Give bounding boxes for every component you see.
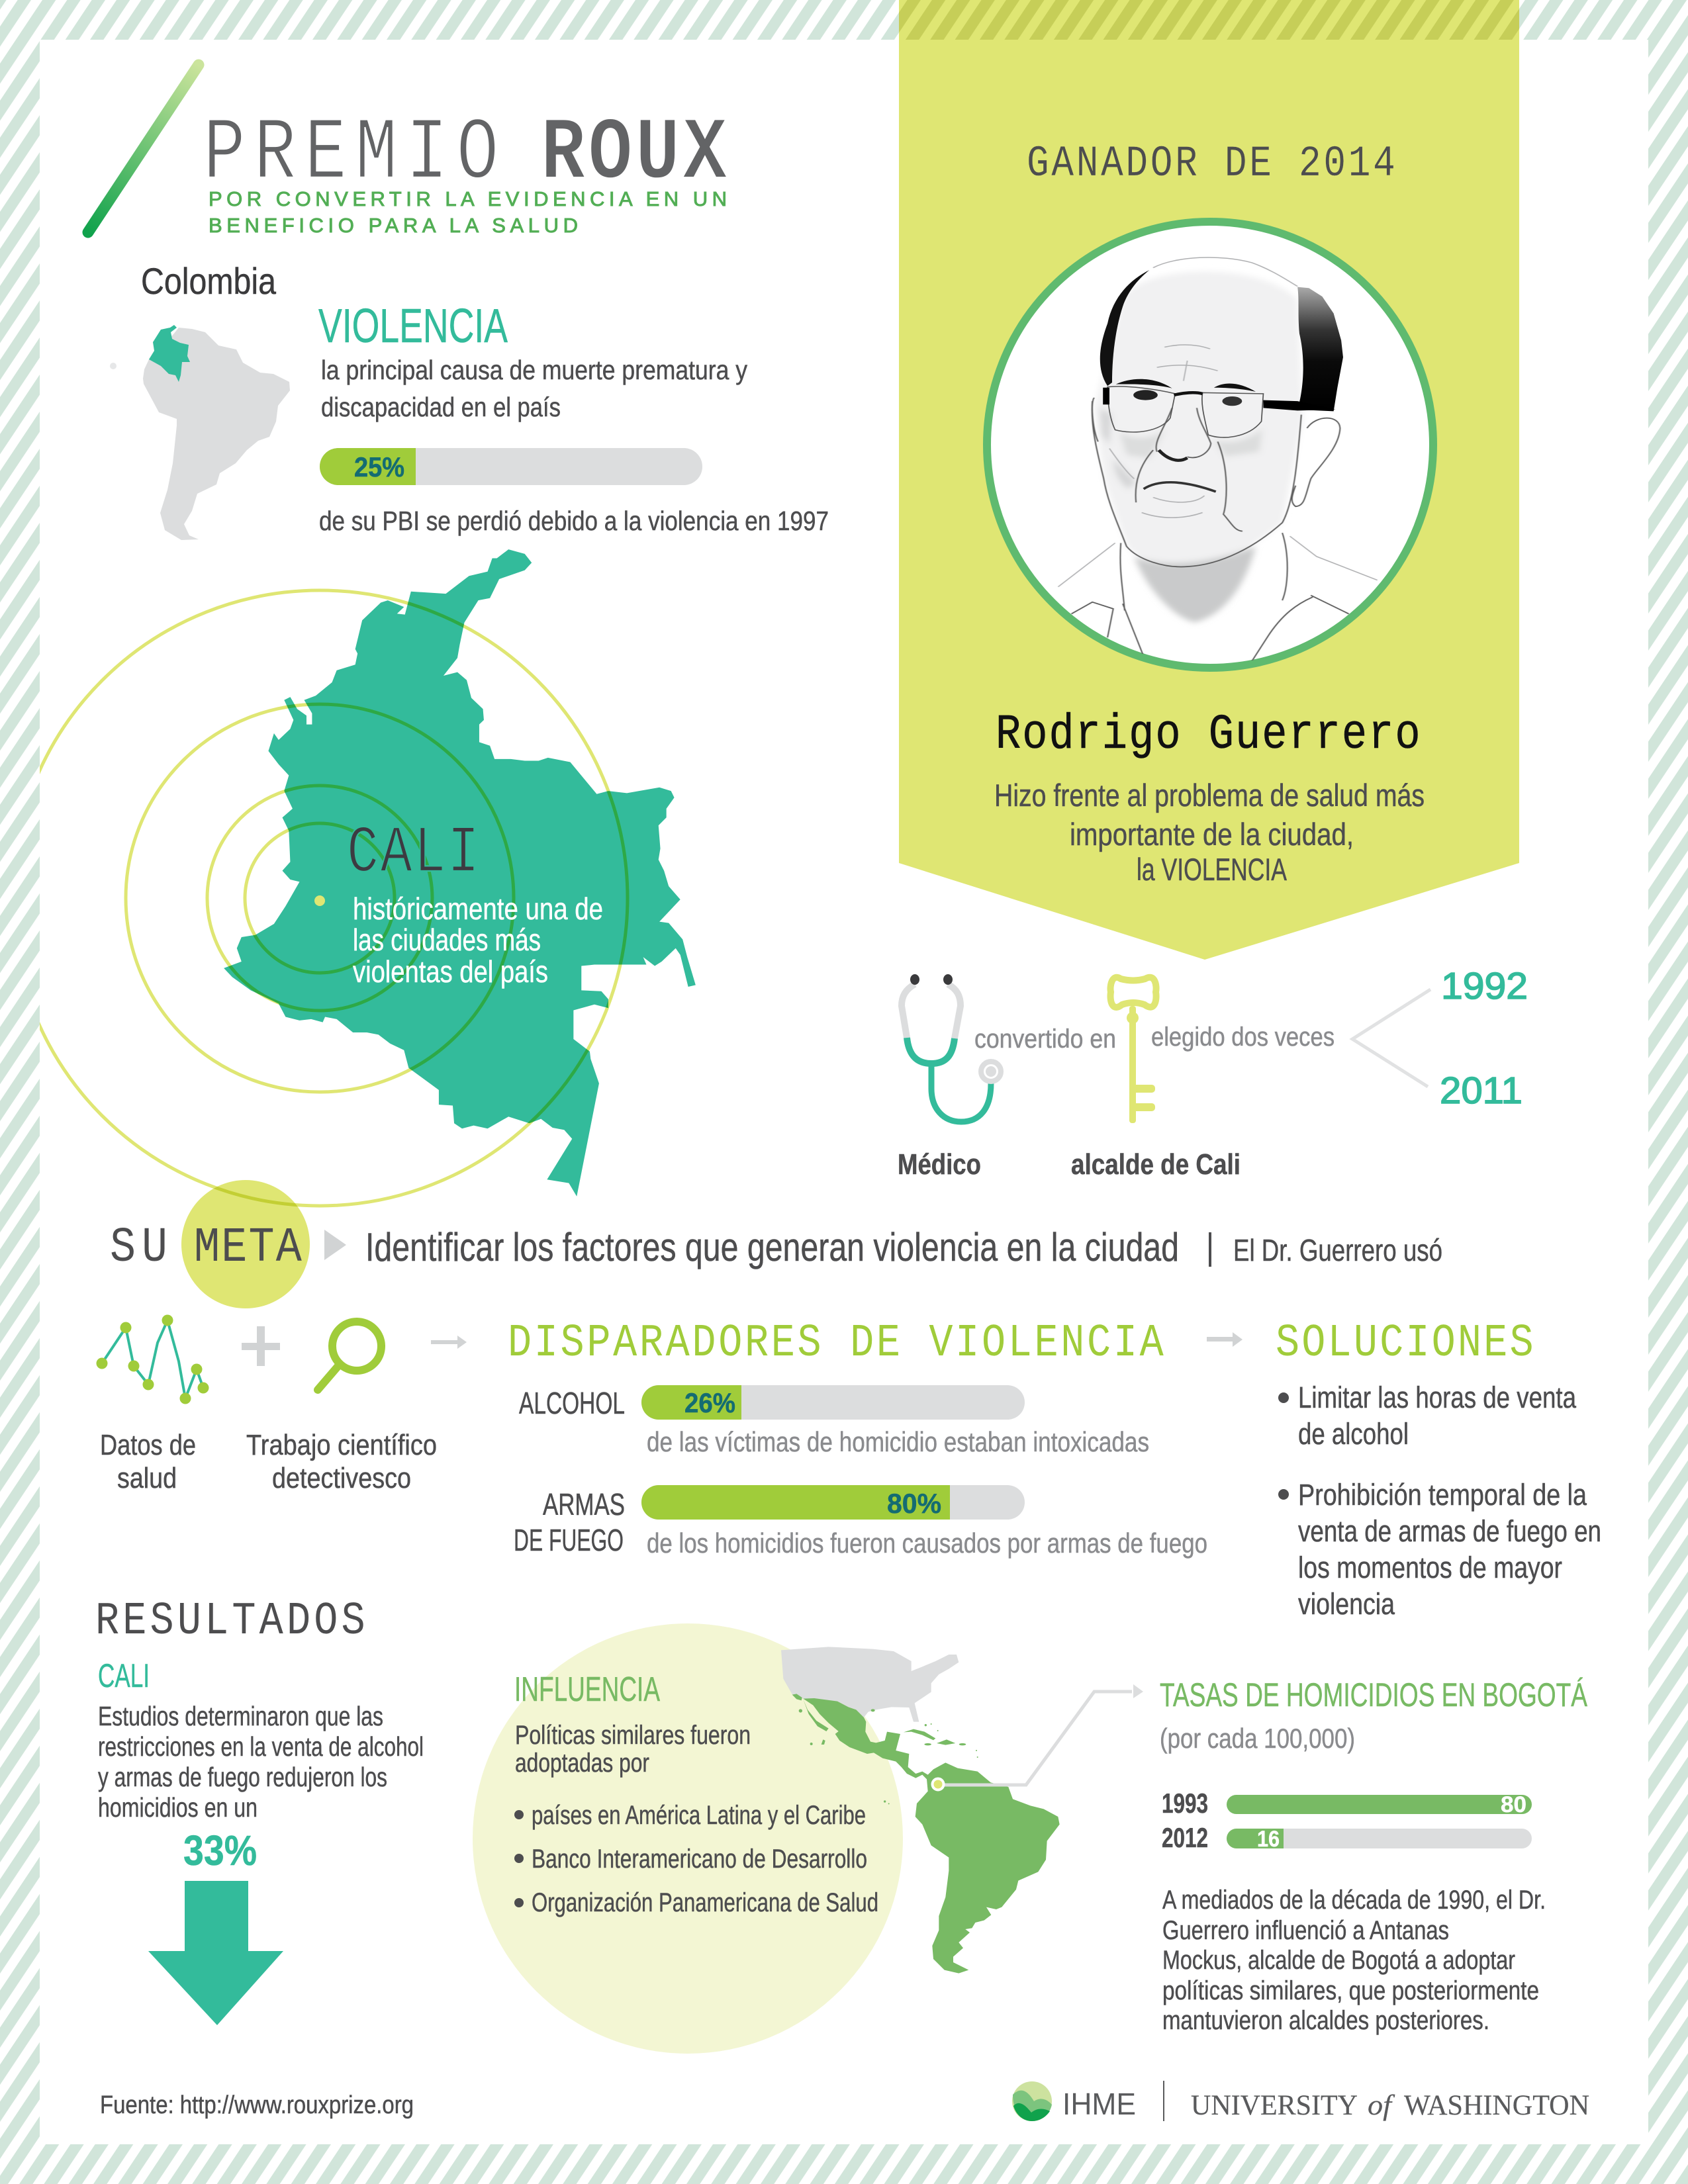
panel: influence circle [473,1623,903,2054]
heading: RESULTADOS: RESULTADOS [95,1595,365,1647]
text: Bogotá paragraph: Guerrero influenció a Antanas [1162,1916,1449,1945]
title: ROUX [541,105,727,204]
row: firearms [514,1485,1207,1559]
text: Cali description: las ciudades más [353,923,541,957]
bar chart: 1993 [1162,1788,1532,1819]
subtitle: POR CONVERTIR LA EVIDENCIA EN UN [209,187,727,210]
text: results: Estudios determinaron que las [98,1701,383,1731]
label: Trabajo científico detectivesco [246,1429,437,1494]
label: Trabajo científico detectivesco: detectivesco [272,1462,411,1494]
list: influenced bodies: países en América Latina y el Caribe [532,1801,866,1830]
label: Datos de salud: salud [117,1462,177,1494]
label: Datos de salud: Datos de [100,1429,196,1461]
bar chart: 2012 [1162,1822,1532,1853]
label: Trabajo científico detectivesco: Trabajo científico [246,1429,437,1461]
banner heading: GANADOR DE 2014 [1027,140,1395,189]
list: influenced bodies [514,1801,878,1917]
arrow to solutions [1207,1332,1243,1347]
text: Cali description [353,891,603,989]
text: GDP lost: de su PBI se perdió debido a la violencia en 1997 [319,506,829,536]
arrow: down [148,1881,283,2025]
list: solutions: de alcohol [1298,1417,1409,1451]
text: elegido dos veces: elegido dos veces [1151,1023,1335,1052]
bar chart: 1993: 80 [1501,1792,1526,1817]
list: solutions [1278,1381,1601,1621]
text: Bogotá paragraph: mantuvieron alcaldes posteriores. [1162,2006,1489,2035]
text: Bogotá paragraph: Mockus, alcalde de Bogotá a adoptar [1162,1946,1515,1975]
icon: magnifying glass [318,1322,381,1390]
text: goal: Identificar los factores que generan violencia en la ciudad [365,1225,1179,1269]
list: influenced bodies: Organización Panamericana de Salud [532,1888,878,1917]
chevron connector to years [1352,989,1430,1087]
text: Bogotá paragraph: A mediados de la década de 1990, el Dr. [1162,1886,1546,1915]
Cali marker [314,895,325,906]
text: results: y armas de fuego redujeron los [98,1762,387,1792]
label: Colombia: Colombia [141,260,277,302]
heading: INFLUENCIA: INFLUENCIA [514,1670,660,1709]
icon: health data line chart [97,1314,209,1404]
arrow to triggers [431,1336,467,1349]
text: Cali description: violentas del país [353,954,548,989]
list: solutions: violencia [1298,1587,1395,1621]
icon: key [1111,978,1156,1123]
panel: winner banner [899,0,1519,960]
subtitle: BENEFICIO PARA LA SALUD [209,214,578,237]
row: alcohol: de las víctimas de homicidio estaban intoxicadas [647,1426,1149,1457]
year 2011: 2011 [1440,1069,1523,1112]
list: influenced bodies: Banco Interamericano de Desarrollo [532,1844,867,1874]
text: violence description: discapacidad en el país [321,392,561,422]
logo: IHME [1012,2081,1136,2121]
list: solutions: venta de armas de fuego en [1298,1514,1601,1548]
logo: IHME: IHME [1062,2087,1136,2121]
list: solutions: Prohibición temporal de la [1298,1478,1587,1512]
bar chart: 1993: 1993 [1162,1788,1208,1819]
bar chart: 2012: 2012 [1162,1822,1208,1853]
text: per 100,000: (por cada 100,000) [1160,1723,1355,1754]
row: firearms: DE FUEGO [514,1523,624,1557]
arrow: goal triangle [324,1230,346,1260]
progress bar: 25%: 25% [354,451,404,482]
list: solutions: Limitar las horas de venta [1298,1381,1577,1414]
heading: SU META: META [194,1220,302,1275]
portrait of Rodrigo Guerrero [987,222,1433,668]
source: Fuente: http://www.rouxprize.org [100,2091,414,2119]
logo: University of Washington: of [1368,2090,1395,2121]
concentric circles around Cali [12,590,628,1206]
heading: VIOLENCIA: VIOLENCIA [318,300,508,353]
heading: triggers: DISPARADORES DE VIOLENCIA [508,1317,1164,1369]
text: influence intro: Políticas similares fueron [515,1721,751,1750]
year 1992: 1992 [1441,965,1528,1007]
logo: University of Washington [1191,2090,1589,2121]
text: results: homicidios en un [98,1792,258,1823]
heading: SU META [110,1220,302,1275]
winner description: Hizo frente al problema de salud más [994,778,1425,813]
winner name: Rodrigo Guerrero [996,707,1421,763]
winner description: la VIOLENCIA [1137,852,1287,887]
label: alcalde de Cali: alcalde de Cali [1071,1148,1241,1181]
map: the Americas [781,1647,1060,1974]
logo: University of Washington: UNIVERSITY [1191,2090,1358,2121]
text: violence description [321,355,747,422]
label: Médico: Médico [898,1148,981,1181]
list: solutions: los momentos de mayor [1298,1551,1562,1584]
heading: CALI: CALI [347,817,479,891]
row: alcohol: ALCOHOL [519,1386,625,1420]
text: results: restricciones en la venta de alcohol [98,1731,424,1762]
progress bar: 25% [320,448,702,485]
text: influence intro [515,1721,751,1778]
winner description [994,778,1425,887]
text: results [98,1701,424,1823]
text: influence intro: adoptadas por [515,1749,649,1778]
connector to Bogotá chart [938,1692,1132,1785]
bar chart: 2012: 16 [1257,1827,1280,1852]
icon: plus [242,1326,280,1366]
subheading: CALI: CALI [98,1657,150,1694]
winner description: importante de la ciudad, [1070,817,1354,852]
subtitle [209,187,727,237]
arrowhead [1133,1684,1143,1698]
text: convertido en: convertido en [974,1024,1116,1054]
row: firearms: 80% [887,1488,941,1519]
text: violence description: la principal causa de muerte prematura y [321,355,747,385]
logo: University of Washington: WASHINGTON [1404,2090,1589,2121]
title: PREMIO [203,105,498,205]
text: El Dr. Guerrero usó: El Dr. Guerrero usó [1233,1233,1442,1267]
row: firearms: de los homicidios fueron causados por armas de fuego [647,1527,1207,1559]
heading: SU META: SU [110,1220,167,1275]
Bogotá marker [932,1779,944,1790]
label: Datos de salud [100,1429,196,1494]
heading: SOLUCIONES: SOLUCIONES [1276,1317,1534,1369]
stat: 33%: 33% [183,1827,257,1874]
text: Cali description: históricamente una de [353,891,603,926]
row: firearms: ARMAS [543,1487,625,1522]
row: alcohol: 26% [684,1387,735,1418]
decorative title slash [88,65,199,232]
map: Colombia [224,549,696,1197]
icon: stethoscope [902,974,1001,1122]
title [203,105,727,205]
text: Bogotá paragraph [1162,1886,1546,2035]
text: Bogotá paragraph: políticas similares, que posteriormente [1162,1976,1539,2005]
highlight circle behind META [181,1180,310,1308]
map: South America with Colombia highlighted [110,325,290,540]
row: alcohol [519,1385,1149,1457]
